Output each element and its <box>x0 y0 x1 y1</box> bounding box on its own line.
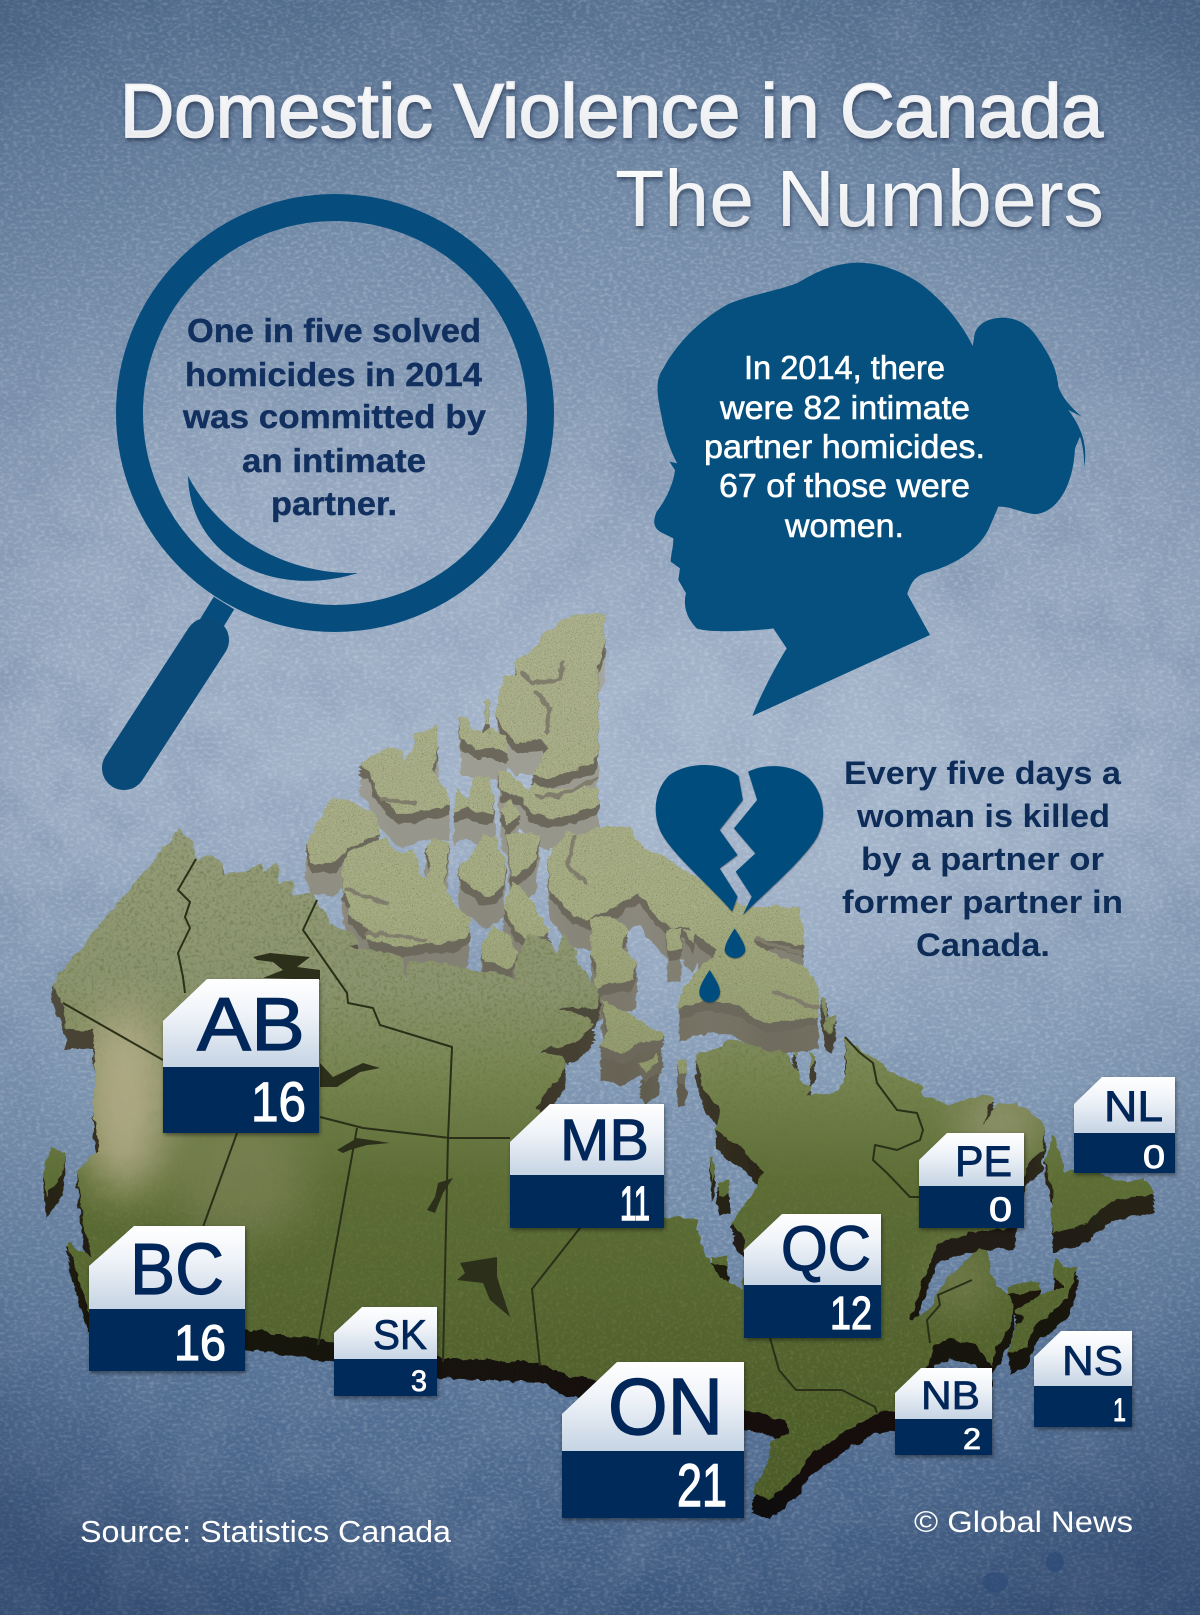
title line 2: The Numbers <box>615 154 1104 243</box>
title line 1: Domestic Violence in Canada <box>120 69 1104 154</box>
label: MB 11: MB <box>560 1108 649 1173</box>
mainland tonal highlights <box>80 1005 1042 1310</box>
magnifying glass icon <box>124 208 540 768</box>
callout: every five days: former partner in <box>842 884 1123 920</box>
label: AB 16: 16 <box>251 1070 306 1133</box>
arctic islands <box>305 613 818 1105</box>
label: PE 0: PE <box>955 1138 1012 1186</box>
label: BC 16 <box>89 1226 245 1371</box>
callout: one in five: partner. <box>271 485 397 522</box>
label: NS 1: NS <box>1062 1337 1123 1384</box>
callout: one in five <box>182 312 487 522</box>
label: QC 12: QC <box>781 1214 871 1284</box>
provincial and territorial borders <box>63 859 972 1413</box>
label: ON 21: ON <box>608 1362 723 1451</box>
label: NL 0: 0 <box>1143 1139 1165 1175</box>
callout: one in five: homicides in 2014 <box>185 356 483 393</box>
callout: 82 intimate partner homicides: were 82 intimate <box>719 389 970 426</box>
callout: every five days: Every five days a <box>844 755 1121 791</box>
callout: every five days: by a partner or <box>861 841 1104 877</box>
callout: one in five: was committed by <box>182 398 487 435</box>
label: NL 0 <box>1074 1077 1175 1175</box>
icon: woman's head silhouette <box>654 263 1085 716</box>
label: MB 11 <box>510 1104 664 1231</box>
label: PE 0: 0 <box>989 1191 1012 1229</box>
label: MB 11: 11 <box>620 1178 650 1231</box>
mainland <box>43 828 1155 1520</box>
callout: 82 intimate partner homicides: partner homicides. <box>704 428 985 465</box>
label: BC 16: 16 <box>174 1315 226 1371</box>
callout: 82 intimate partner homicides <box>704 349 985 544</box>
label: QC 12: 12 <box>830 1287 872 1339</box>
label: NS 1: 1 <box>1113 1392 1126 1428</box>
label: AB 16 <box>163 979 319 1133</box>
callout: one in five: an intimate <box>242 442 426 479</box>
label: NB 2: NB <box>921 1374 980 1418</box>
arctic extrusion <box>305 629 818 1105</box>
label: SK 3 <box>334 1307 437 1398</box>
label: BC 16: BC <box>130 1230 224 1310</box>
callout: every five days: woman is killed <box>856 798 1110 834</box>
label: SK 3: 3 <box>411 1365 427 1398</box>
mainland surface <box>43 828 1155 1500</box>
callout: 82 intimate partner homicides: 67 of those were <box>719 467 970 504</box>
label: PE 0 <box>919 1133 1024 1229</box>
lakes <box>253 953 510 1317</box>
icon: broken heart with tear drops <box>656 765 823 1002</box>
callout: 82 intimate partner homicides: In 2014, there <box>744 349 945 386</box>
label: NB 2 <box>895 1368 992 1456</box>
label: SK 3: SK <box>373 1311 427 1358</box>
label: NS 1 <box>1034 1331 1132 1428</box>
label: ON 21: 21 <box>677 1452 727 1519</box>
arctic fjords <box>346 663 818 1008</box>
label: QC 12 <box>744 1214 881 1339</box>
callout: 82 intimate partner homicides: women. <box>784 507 904 544</box>
label: NL 0: NL <box>1104 1083 1163 1131</box>
callout: every five days <box>842 755 1123 963</box>
map of Canada <box>43 613 1155 1520</box>
callout: one in five: One in five solved <box>187 312 481 349</box>
source credit: Source: Statistics Canada <box>80 1514 452 1549</box>
label: NB 2: 2 <box>963 1423 981 1456</box>
arctic land surface <box>305 613 818 1073</box>
copyright credit: © Global News <box>914 1506 1133 1539</box>
title <box>120 69 1104 243</box>
label: ON 21 <box>562 1362 744 1519</box>
callout: every five days: Canada. <box>916 927 1050 963</box>
mainland extrusion <box>43 832 1155 1520</box>
arctic dark extrusion band <box>305 616 818 1083</box>
label: AB 16: AB <box>197 982 305 1066</box>
